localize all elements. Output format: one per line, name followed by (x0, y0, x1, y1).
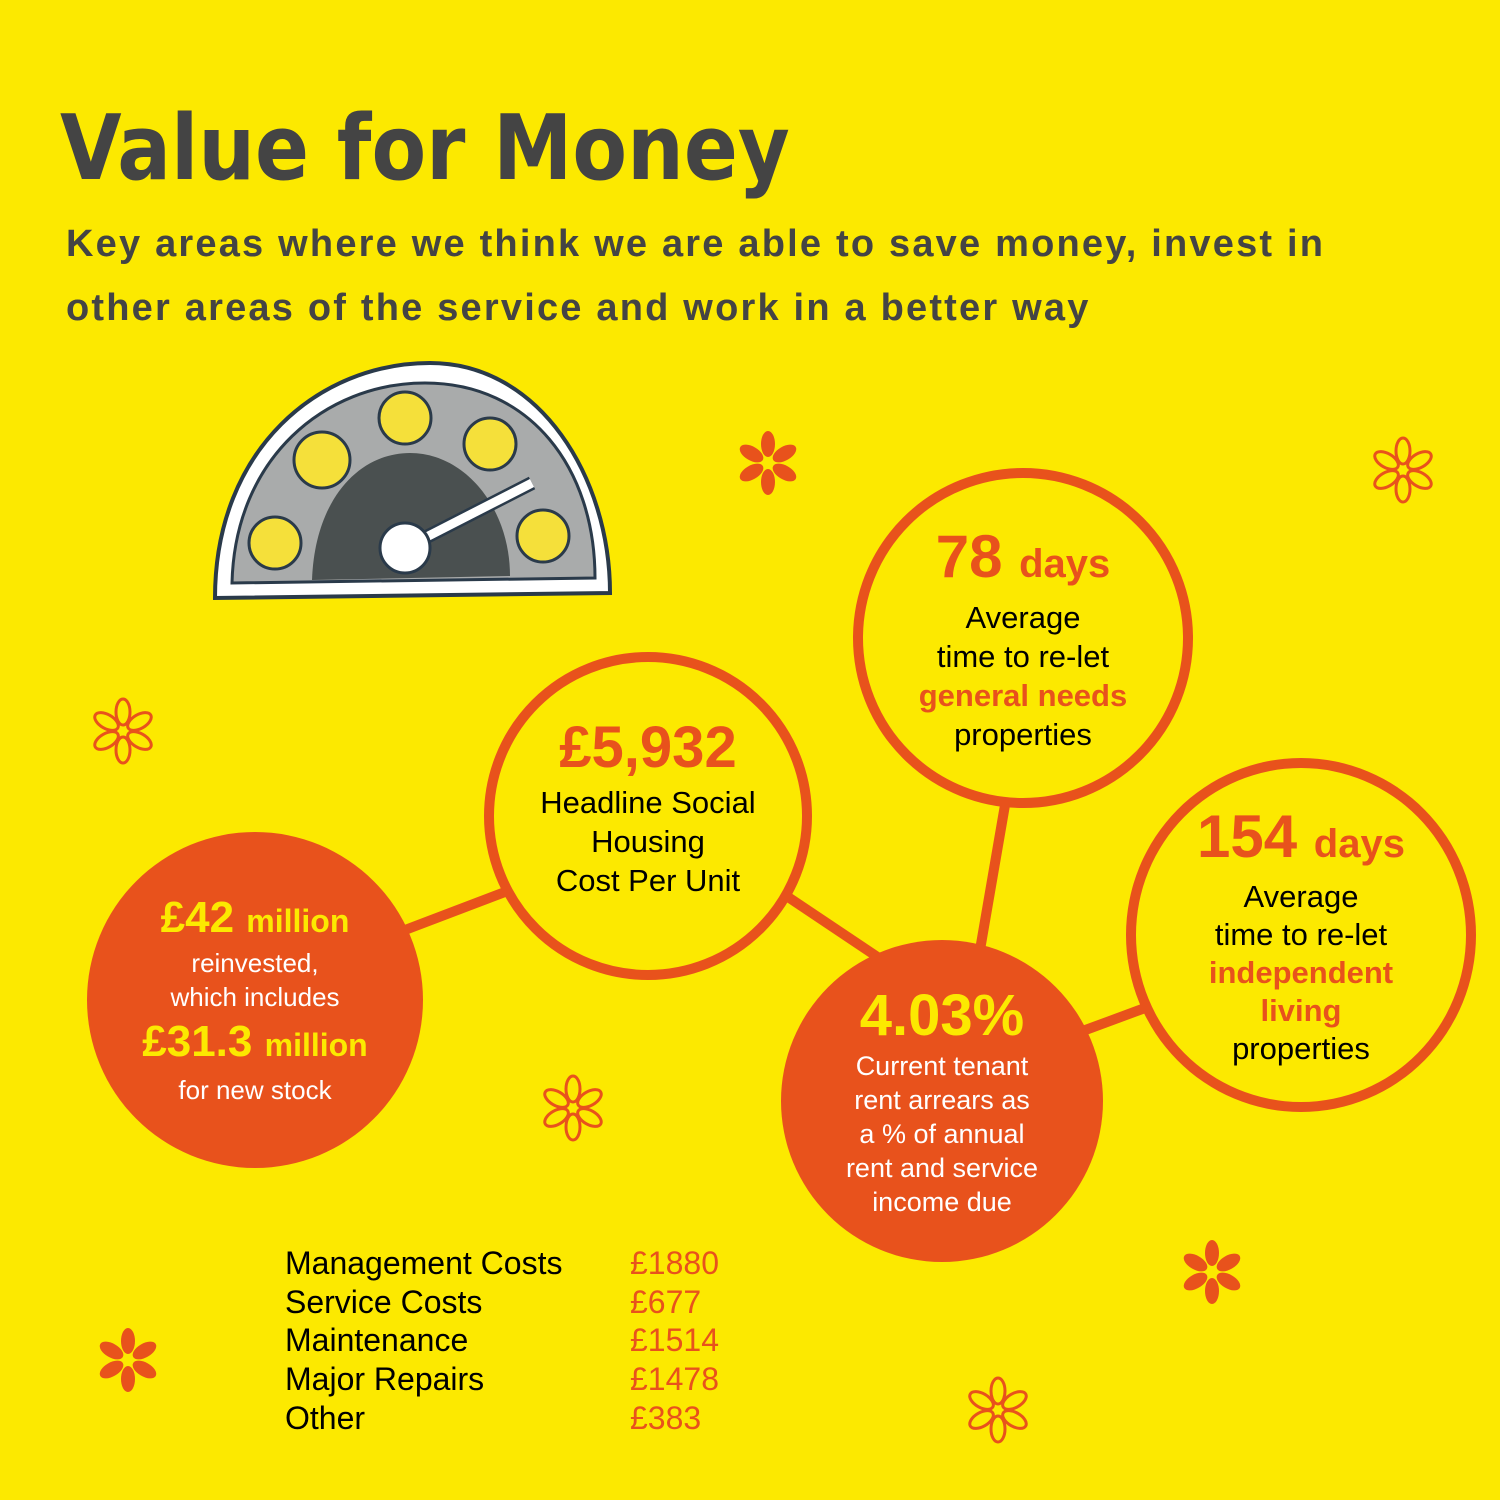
circle: 154 days (1126, 758, 1476, 1112)
circle: 154 days: living (1261, 992, 1341, 1028)
circle: 78 days: Average (966, 600, 1080, 634)
cost breakdown table: £1880 (630, 1245, 719, 1281)
circle: 154 days: independent (1209, 954, 1393, 990)
cost breakdown table: Major Repairs (285, 1361, 484, 1397)
circle: £42 million: £31.3 million (142, 1017, 368, 1066)
circle: 4.03%: Current tenant (856, 1051, 1028, 1081)
circle: 154 days: properties (1232, 1030, 1370, 1066)
cost breakdown table (285, 1245, 719, 1436)
circle: 78 days: properties (954, 716, 1092, 752)
circle: £5,932: Housing (591, 824, 705, 858)
circle: £42 million: £42 million (161, 893, 349, 942)
circle: 4.03% (781, 940, 1103, 1262)
cost breakdown table: Service Costs (285, 1284, 482, 1320)
circle: £5,932 (484, 652, 812, 980)
circle: £5,932: £5,932 (559, 714, 737, 780)
circle: 78 days: time to re-let (937, 638, 1109, 674)
circle: 78 days: 78 days (936, 522, 1110, 590)
cost breakdown table: £1514 (630, 1322, 719, 1358)
subtitle (66, 223, 1325, 329)
circle: 4.03%: rent arrears as (854, 1085, 1030, 1115)
subtitle: other areas of the service and work in a better way (66, 287, 1091, 329)
circle: £42 million: for new stock (178, 1075, 332, 1105)
circle: 4.03%: rent and service (846, 1153, 1038, 1183)
cost breakdown table: £383 (630, 1400, 701, 1436)
circle: 78 days: general needs (919, 678, 1127, 712)
cost breakdown table: Other (285, 1400, 365, 1436)
cost breakdown table: £1478 (630, 1361, 719, 1397)
cost breakdown table: Management Costs (285, 1245, 562, 1281)
circle: 4.03%: 4.03% (860, 983, 1024, 1048)
circle: 154 days: 154 days (1197, 802, 1405, 870)
circle: £42 million: reinvested, (191, 948, 319, 978)
circle: 78 days (853, 468, 1193, 808)
subtitle: Key areas where we think we are able to save money, invest in (66, 223, 1325, 265)
circle: £5,932: Headline Social (540, 784, 756, 820)
circle: £42 million: which includes (170, 982, 340, 1012)
circle: 154 days: time to re-let (1215, 916, 1387, 952)
circle: 4.03%: income due (872, 1187, 1012, 1217)
icon: gauge (213, 361, 612, 600)
circle: £42 million (87, 832, 423, 1168)
title: Value for Money (60, 96, 790, 201)
cost breakdown table: Maintenance (285, 1322, 468, 1358)
circle: 154 days: Average (1244, 878, 1358, 914)
circle: £5,932: Cost Per Unit (556, 862, 740, 898)
cost breakdown table: £677 (630, 1284, 701, 1320)
circle: 4.03%: a % of annual (859, 1119, 1025, 1149)
